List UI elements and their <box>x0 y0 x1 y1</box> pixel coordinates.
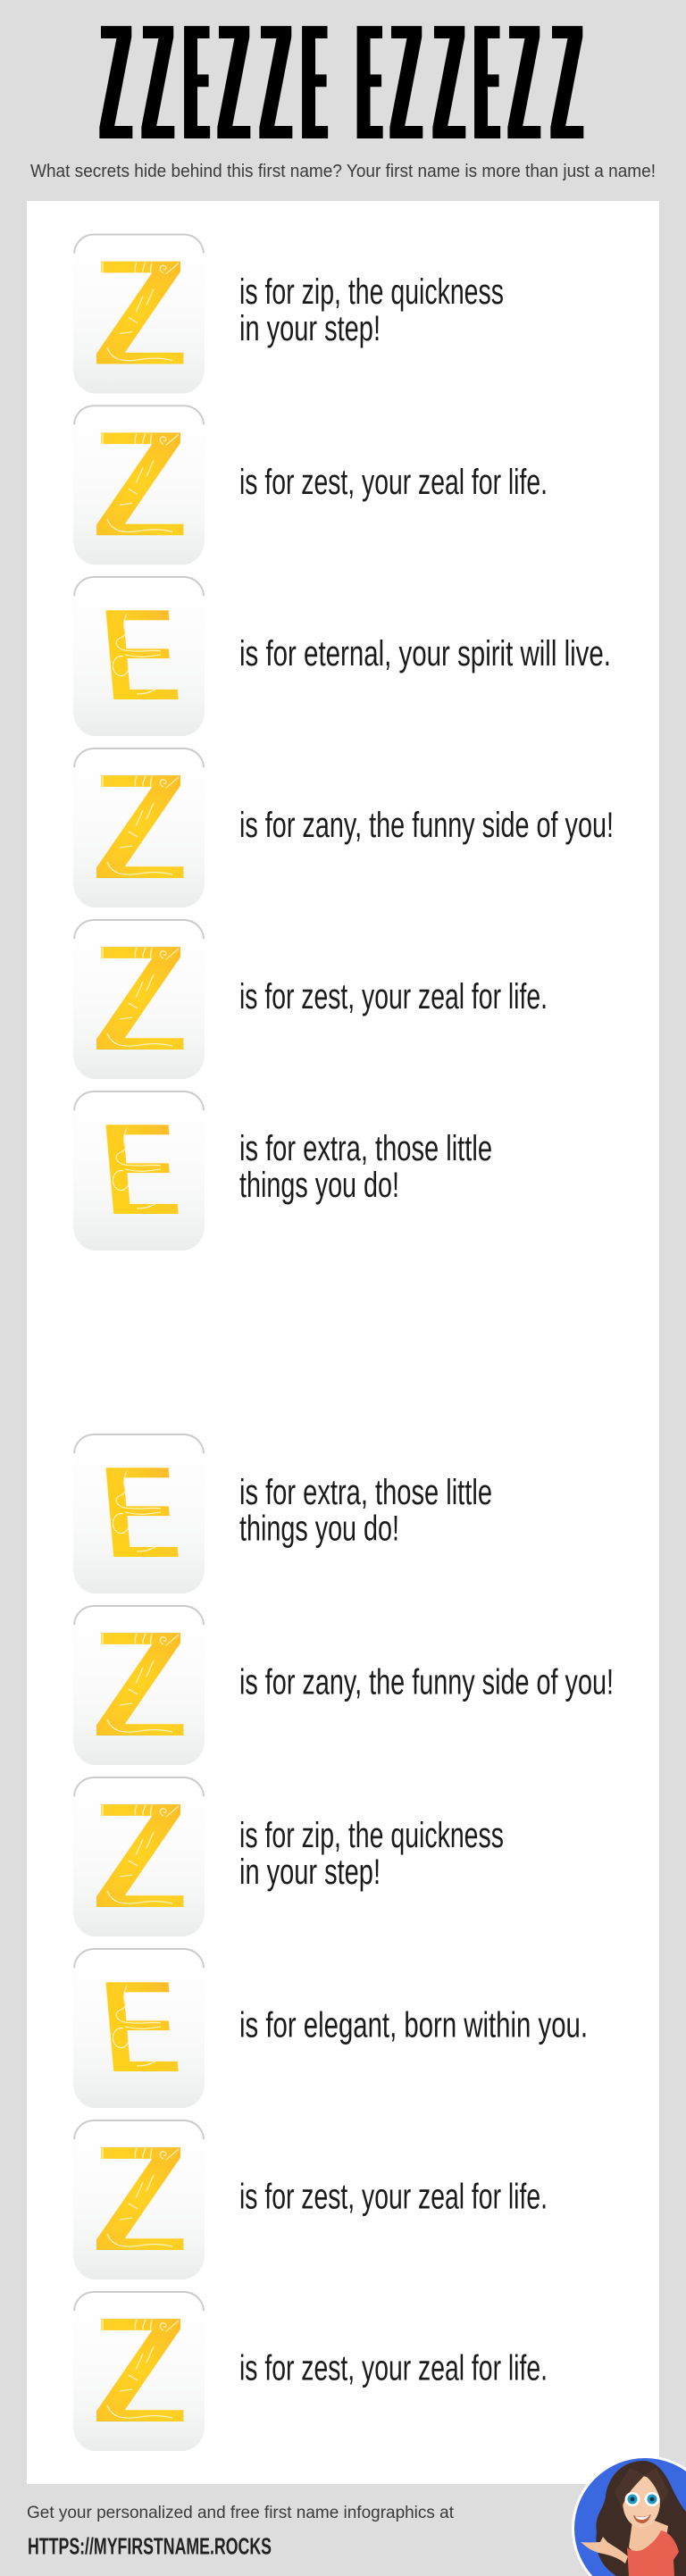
description text: is for extra, those little <box>239 1473 492 1512</box>
icon: letter Z tile: Z <box>99 230 180 396</box>
icon: letter Z tile <box>73 1773 205 1939</box>
row 12: Z for zest <box>73 2287 548 2454</box>
icon: letter Z tile <box>73 230 205 396</box>
row 7: E for extra <box>73 1434 492 1593</box>
row 8: Z for zany <box>73 1602 614 1768</box>
description text: is for zest, your zeal for life. <box>239 977 548 1016</box>
row 10: E for elegant <box>73 1948 588 2108</box>
row 2: Z for zest <box>73 401 548 567</box>
icon: letter E tile <box>73 1948 205 2108</box>
row 5: Z for zest <box>73 916 548 1082</box>
icon: letter E tile: E <box>98 1955 182 2100</box>
icon: letter Z tile <box>73 2287 205 2454</box>
title <box>104 0 580 174</box>
row 9: Z for zip <box>73 1773 504 1939</box>
icon: letter Z tile <box>73 1602 205 1768</box>
row 6: E for extra <box>73 1091 492 1250</box>
description text: is for zip, the quickness <box>239 1816 504 1855</box>
icon: letter E tile <box>73 576 205 736</box>
description text <box>239 1473 492 1549</box>
description text: things you do! <box>239 1510 399 1549</box>
row 4: Z for zany <box>73 744 614 910</box>
icon: letter Z tile: Z <box>99 1773 180 1939</box>
icon: letter Z tile: Z <box>99 1602 180 1768</box>
footer call to action: Get your personalized and free first name infographics at <box>27 2504 455 2522</box>
icon: letter Z tile: Z <box>99 401 180 567</box>
description text: in your step! <box>239 1853 381 1892</box>
icon: letter Z tile <box>73 2116 205 2282</box>
icon: letter E tile <box>73 1091 205 1250</box>
description text <box>239 272 504 348</box>
icon: letter E tile <box>73 1434 205 1593</box>
footer url: HTTPS://MYFIRSTNAME.ROCKS <box>28 2533 272 2560</box>
subtitle: What secrets hide behind this first name? Your first name is more than just a name! <box>30 162 656 181</box>
icon: letter E tile: E <box>98 1441 182 1585</box>
icon: letter E tile: E <box>98 583 182 728</box>
avatar: cartoon woman in blue circle <box>572 2455 686 2576</box>
description text <box>239 1816 504 1892</box>
description text: is for zest, your zeal for life. <box>239 2349 548 2388</box>
row 3: E for eternal <box>73 576 611 736</box>
row 11: Z for zest <box>73 2116 548 2282</box>
icon: letter Z tile: Z <box>99 916 180 1082</box>
icon: letter Z tile <box>73 916 205 1082</box>
icon: letter Z tile: Z <box>99 744 180 910</box>
description text: is for extra, those little <box>239 1129 492 1168</box>
icon: letter Z tile <box>73 401 205 567</box>
description text <box>239 1129 492 1205</box>
description text: things you do! <box>239 1166 399 1205</box>
description text: is for zest, your zeal for life. <box>239 2178 548 2217</box>
description text: in your step! <box>239 309 381 348</box>
description text: is for zest, your zeal for life. <box>239 463 548 502</box>
description text: is for zip, the quickness <box>239 272 504 312</box>
icon: letter Z tile: Z <box>99 2116 180 2282</box>
row 1: Z for zip <box>73 230 504 396</box>
icon: letter E tile: E <box>98 1098 182 1242</box>
icon: letter Z tile <box>73 744 205 910</box>
icon: letter Z tile: Z <box>99 2287 180 2454</box>
